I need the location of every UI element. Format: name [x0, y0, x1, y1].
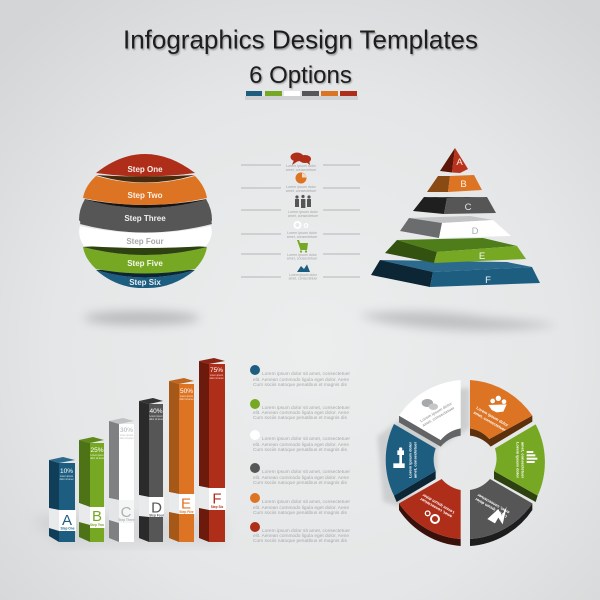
- divider row 2: [241, 188, 360, 189]
- colour key bars: [245, 91, 358, 100]
- ring segment: white: amet, consectetuer: [421, 405, 456, 428]
- title: Infographics Design Templates: [124, 26, 479, 56]
- pyramid layer D: [400, 216, 511, 238]
- bar A: Step One: [60, 526, 75, 530]
- legend item 2: Lorem ipsum dolor sit amet, consectetuer: [262, 405, 350, 411]
- sphere band: step three: Step Three: [124, 214, 166, 223]
- legend item 3: elit. Aenean commodo ligula eget dolor. Aene: [253, 442, 349, 448]
- sphere band: step one: Step One: [127, 165, 163, 174]
- legend item 2: Cum sociis natoque penatibus et magnis dis: [253, 415, 347, 421]
- legend item 3: [250, 430, 350, 453]
- text: item 5: amet, consectetuer: [287, 256, 318, 260]
- ring segment: white: [399, 380, 461, 447]
- legend item 4: elit. Aenean commodo ligula eget dolor. Aene: [253, 475, 349, 481]
- bar B: [79, 437, 105, 542]
- legend item 2: [250, 399, 350, 421]
- pyramid layer B: [427, 175, 482, 192]
- ring segment: orange: amet, consectetuer: [473, 410, 507, 432]
- text: item 4: [287, 231, 318, 239]
- bar A: [49, 457, 76, 542]
- text: item 1: amet, consectetuer: [286, 168, 317, 172]
- bar chart shadow: [32, 515, 225, 545]
- bar C: 30%: [120, 427, 133, 434]
- pyramid layer E: [385, 238, 526, 263]
- ring segment: blue: amet, consectetuer: [413, 441, 418, 478]
- legend item 2: elit. Aenean commodo ligula eget dolor. Aene: [253, 410, 349, 416]
- text: item 1: Lorem ipsum dolor: [286, 164, 317, 168]
- bar E: [169, 378, 195, 542]
- legend item 1: Lorem ipsum dolor sit amet, consectetuer: [262, 371, 350, 377]
- ring segment: dark grey: amet, consectetuer: [476, 492, 510, 515]
- bar B: B: [92, 508, 102, 525]
- bar A: 10%: [60, 468, 73, 475]
- bar C: [109, 418, 135, 542]
- text: item 2: amet, consectetuer: [286, 189, 317, 193]
- ring segment: red: amet, consectetuer: [419, 496, 453, 519]
- text: item 2: Lorem ipsum dolor: [286, 185, 317, 189]
- legend item 5: Cum sociis natoque penatibus et magnis dis: [253, 510, 347, 516]
- bar E: Step Five: [179, 510, 194, 514]
- icon: mountains: [297, 264, 310, 272]
- legend item 4: Cum sociis natoque penatibus et magnis dis: [253, 480, 347, 486]
- bar F: F: [212, 490, 222, 508]
- ring segment: green: [494, 424, 545, 502]
- pyramid layer C: C: [465, 202, 472, 213]
- legend item 6: Cum sociis natoque penatibus et magnis dis: [253, 538, 347, 544]
- pyramid layer A: A: [456, 157, 463, 168]
- title: [123, 24, 479, 90]
- text: item 3: [288, 210, 319, 218]
- icon: speech bubbles: [290, 152, 311, 165]
- bar E: Lorem ipsum: [180, 395, 193, 398]
- bar E: E: [181, 496, 191, 512]
- panel: segmented ring: [377, 380, 545, 546]
- pyramid layer F: F: [485, 275, 491, 286]
- text: item 5: [287, 253, 318, 260]
- panel: legend list: [250, 365, 350, 544]
- text: item 3: Lorem ipsum dolor: [288, 210, 319, 214]
- ring segment: orange: Lorem ipsum dolor: [476, 405, 510, 428]
- divider row 6: [241, 276, 360, 278]
- pyramid layer D: D: [472, 226, 479, 237]
- ring segment: blue: [386, 424, 436, 502]
- sphere band: step two: Step Two: [128, 191, 163, 200]
- bar C: C: [121, 504, 132, 521]
- bar B: Step Two: [90, 523, 104, 527]
- text: item 5: Lorem ipsum dolor: [287, 253, 318, 257]
- text: item 6: Lorem ipsum dolor: [289, 273, 318, 277]
- bar C: Step Three: [118, 518, 135, 522]
- bar B: 25%: [90, 447, 104, 454]
- bar F: Step Six: [211, 505, 224, 509]
- text: item 6: [289, 273, 318, 280]
- bar F: dolor sit amet: [210, 377, 224, 380]
- bar D: [139, 398, 165, 542]
- text: item 6: amet, consectetuer: [289, 276, 318, 280]
- divider row 1: [241, 164, 360, 166]
- bar D: 40%: [149, 408, 163, 415]
- icon: shopping cart: [297, 240, 308, 253]
- bar D: dolor sit amet: [149, 418, 163, 421]
- legend item 5: [250, 493, 350, 516]
- ring shadow: [377, 388, 469, 507]
- text: item 4: amet, consectetuer: [287, 235, 318, 239]
- legend item 6: [250, 522, 350, 544]
- bar C: dolor sit amet: [120, 437, 134, 440]
- bar B: Lorem ipsum: [90, 454, 104, 457]
- bar E: 50%: [180, 388, 193, 395]
- pyramid layer E: E: [479, 251, 485, 262]
- ring segment: white: Lorem ipsum dolor: [419, 401, 453, 423]
- legend item 3: Cum sociis natoque penatibus et magnis dis: [253, 447, 347, 453]
- text: item 2: [286, 185, 317, 193]
- legend item 1: Cum sociis natoque penatibus et magnis dis: [253, 382, 347, 388]
- pyramid layer B: B: [460, 179, 467, 190]
- bar A: Lorem ipsum: [60, 475, 73, 478]
- pyramid shadow: [358, 312, 558, 330]
- bar A: dolor sit amet: [60, 478, 74, 481]
- sphere band: step six: Step Six: [129, 278, 161, 287]
- bar D: D: [151, 500, 162, 516]
- legend item 5: elit. Aenean commodo ligula eget dolor. Aene: [253, 505, 349, 511]
- sphere shadow: [84, 311, 200, 325]
- legend item 6: elit. Aenean commodo ligula eget dolor. Aene: [253, 533, 349, 539]
- bar E: dolor sit amet: [180, 398, 194, 401]
- icon: pie chart: [296, 172, 306, 184]
- ring segment: orange: [470, 380, 532, 447]
- legend item 4: Lorem ipsum dolor sit amet, consectetuer: [262, 469, 350, 475]
- legend item 1: elit. Aenean commodo ligula eget dolor. Aene: [253, 377, 349, 383]
- bar F: 75%: [210, 367, 223, 374]
- title: 6 Options: [250, 63, 353, 90]
- panel: layered pyramid: [371, 148, 540, 287]
- ring segment: dark grey: [470, 479, 532, 546]
- bar D: Lorem ipsum: [149, 415, 163, 418]
- ring segment: green: amet, consectetuer: [521, 442, 526, 479]
- text: item 3: amet, consectetuer: [288, 214, 319, 218]
- title: 6 Options: [249, 62, 352, 89]
- bar B: dolor sit amet: [90, 457, 104, 460]
- pyramid layer A: [440, 148, 468, 173]
- divider row 4: [241, 234, 360, 235]
- ring segment: red: [399, 479, 461, 546]
- bar F: [199, 358, 226, 542]
- divider row 3: [241, 210, 360, 211]
- panel: 3D bar chart: [49, 358, 226, 542]
- text: item 4: Lorem ipsum dolor: [287, 231, 318, 235]
- bar C: Lorem ipsum: [120, 434, 133, 437]
- legend item 4: [250, 463, 350, 486]
- icon: people: [295, 195, 311, 208]
- sphere band: step four: Step Four: [126, 237, 164, 246]
- ring segment: red: Lorem ipsum dolor: [421, 493, 455, 515]
- panel: icon list: [241, 152, 360, 280]
- text: item 1: [286, 164, 317, 172]
- pyramid layer C: [413, 197, 496, 214]
- divider row 5: [241, 254, 360, 255]
- ring segment: blue: Lorem ipsum dolor: [408, 442, 413, 478]
- legend item 6: Lorem ipsum dolor sit amet, consectetuer: [262, 528, 350, 534]
- pyramid layer F: [371, 260, 540, 287]
- panel: layered sphere: [79, 154, 212, 288]
- sphere band: step five: Step Five: [127, 259, 163, 268]
- legend item 1: [250, 365, 350, 388]
- bar D: Step Four: [149, 514, 165, 518]
- bar A: A: [62, 512, 72, 529]
- icon: gears: [294, 222, 308, 228]
- title: Infographics Design Templates: [123, 24, 478, 54]
- legend item 3: Lorem ipsum dolor sit amet, consectetuer: [262, 436, 350, 442]
- bar F: Lorem ipsum: [210, 374, 223, 377]
- legend item 5: Lorem ipsum dolor sit amet, consectetuer: [262, 499, 350, 505]
- ring segment: green: Lorem ipsum dolor: [516, 442, 521, 478]
- ring segment: dark grey: Lorem ipsum dolor: [474, 497, 508, 519]
